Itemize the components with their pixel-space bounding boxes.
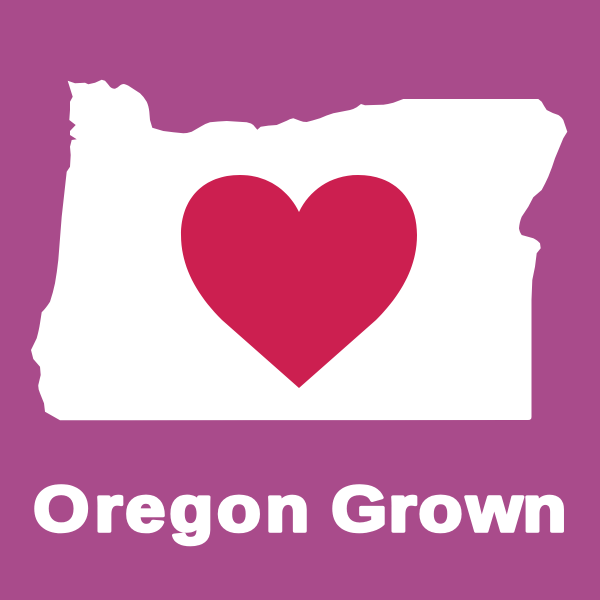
title: Oregon Grown: e: [125, 474, 165, 545]
title: Oregon Grown: G: [331, 474, 387, 545]
icon: heart: [181, 175, 417, 388]
title: Oregon Grown: r: [95, 474, 122, 545]
map: Oregon state silhouette: [31, 80, 567, 420]
title: Oregon Grown: g: [170, 474, 213, 545]
title: Oregon Grown: o: [217, 474, 261, 545]
title: Oregon Grown: w: [465, 474, 522, 545]
title: Oregon Grown: O: [33, 474, 89, 545]
title: Oregon Grown: r: [389, 474, 416, 545]
title: Oregon Grown: n: [265, 474, 309, 545]
title: Oregon Grown: o: [419, 474, 462, 545]
title: Oregon Grown: n: [523, 474, 566, 545]
